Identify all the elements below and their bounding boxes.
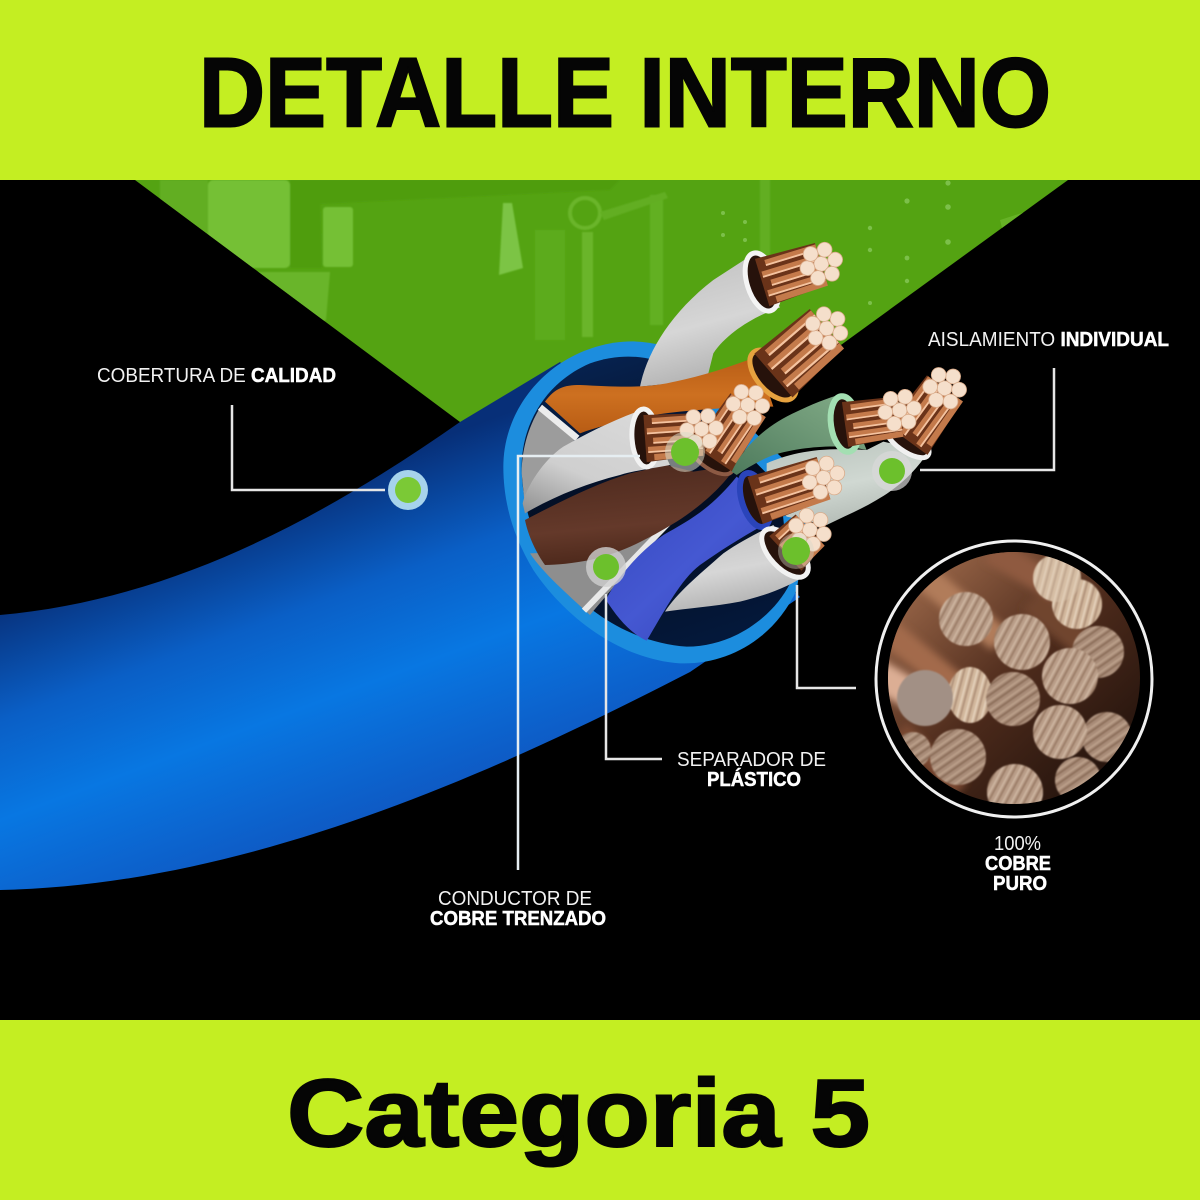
callout: separador de plastico: PLÁSTICO (707, 768, 801, 791)
plastic separator (522, 405, 671, 615)
wire: orange (545, 291, 863, 433)
callout: aislamiento individual (872, 329, 1169, 491)
wire: white top (640, 229, 851, 387)
callout: separador de plastico: SEPARADOR DE (677, 749, 826, 771)
bottom banner (0, 1020, 1200, 1200)
title: DETALLE INTERNO (199, 38, 1051, 148)
label: 100% cobre puro: 100% (994, 833, 1041, 855)
label: 100% cobre puro: COBRE (985, 853, 1051, 875)
callout: cobre puro connector (778, 533, 856, 688)
callout: conductor de cobre trenzado (430, 432, 705, 930)
label: 100% cobre puro (985, 833, 1051, 895)
callout: cobertura de calidad (97, 365, 428, 510)
green background wedge (135, 180, 1068, 422)
callout: conductor de cobre trenzado: COBRE TRENZADO (430, 908, 606, 930)
wire end: white bottom (754, 493, 846, 585)
main black panel (0, 180, 1200, 1020)
wire: blue (606, 444, 853, 641)
cable opening ring (503, 341, 813, 663)
top banner (0, 0, 1200, 180)
callout: separador de plastico (586, 547, 826, 791)
blue cable body (0, 362, 800, 890)
callout: conductor de cobre trenzado: CONDUCTOR DE (438, 888, 592, 910)
wire: white left (523, 404, 726, 513)
wire: light right (767, 355, 979, 525)
callout: aislamiento individual: AISLAMIENTO INDIVIDUAL (928, 329, 1169, 351)
label: 100% cobre puro: PURO (993, 873, 1047, 895)
wire: brown (525, 373, 780, 565)
wire: green (732, 385, 926, 475)
cable wires (522, 229, 979, 641)
callout: cobertura de calidad: COBERTURA DE CALIDAD (97, 365, 336, 387)
subtitle: Categoria 5 (287, 1060, 870, 1167)
wire: white bottom (665, 525, 808, 612)
copper close-up circle (870, 541, 1152, 820)
